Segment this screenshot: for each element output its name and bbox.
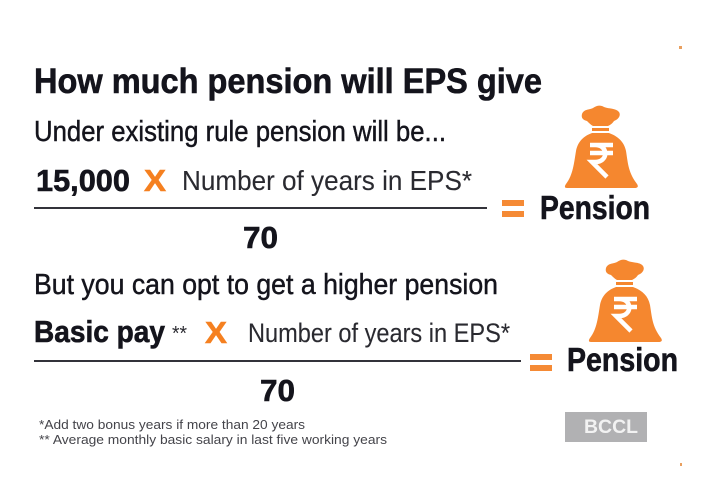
- result label: Pension: Pension: [540, 189, 650, 226]
- credit badge: BCCL: BCCL: [584, 417, 638, 438]
- credit badge: BCCL: [565, 412, 647, 442]
- title: How much pension will EPS give: [34, 62, 542, 101]
- denominator 70: 70: [243, 220, 278, 255]
- subheading: existing rule: Under existing rule pension will be...: [34, 116, 446, 148]
- denominator 70: 70: [260, 373, 295, 408]
- subheading: higher pension: But you can opt to get a higher pension: [34, 269, 498, 301]
- multiply sign: X: [205, 315, 227, 350]
- fraction line: [34, 207, 487, 209]
- footnote 1: *Add two bonus years if more than 20 years: [39, 418, 305, 432]
- formula numerator: 15,000: 15,000: [36, 163, 130, 198]
- fraction line: [34, 360, 521, 362]
- higher pension section: [34, 260, 678, 408]
- rupee glyph: [614, 299, 637, 331]
- result label: Pension: Pension: [567, 341, 678, 378]
- equals sign: [530, 354, 552, 371]
- equals sign: [502, 200, 524, 217]
- existing rule section: [34, 106, 650, 255]
- icon: money bag with rupee: [589, 260, 662, 342]
- rupee glyph: [590, 145, 613, 177]
- icon: money bag with rupee: [565, 106, 638, 188]
- formula numerator: basic pay: Basic pay: [34, 314, 166, 349]
- double asterisk: **: [172, 323, 187, 345]
- years in EPS text: Number of years in EPS*: [248, 318, 510, 348]
- footnote 2: ** Average monthly basic salary in last five working years: [39, 433, 387, 447]
- years in EPS text: Number of years in EPS*: [182, 165, 472, 196]
- multiply sign: X: [144, 163, 166, 198]
- footnotes: [39, 418, 387, 447]
